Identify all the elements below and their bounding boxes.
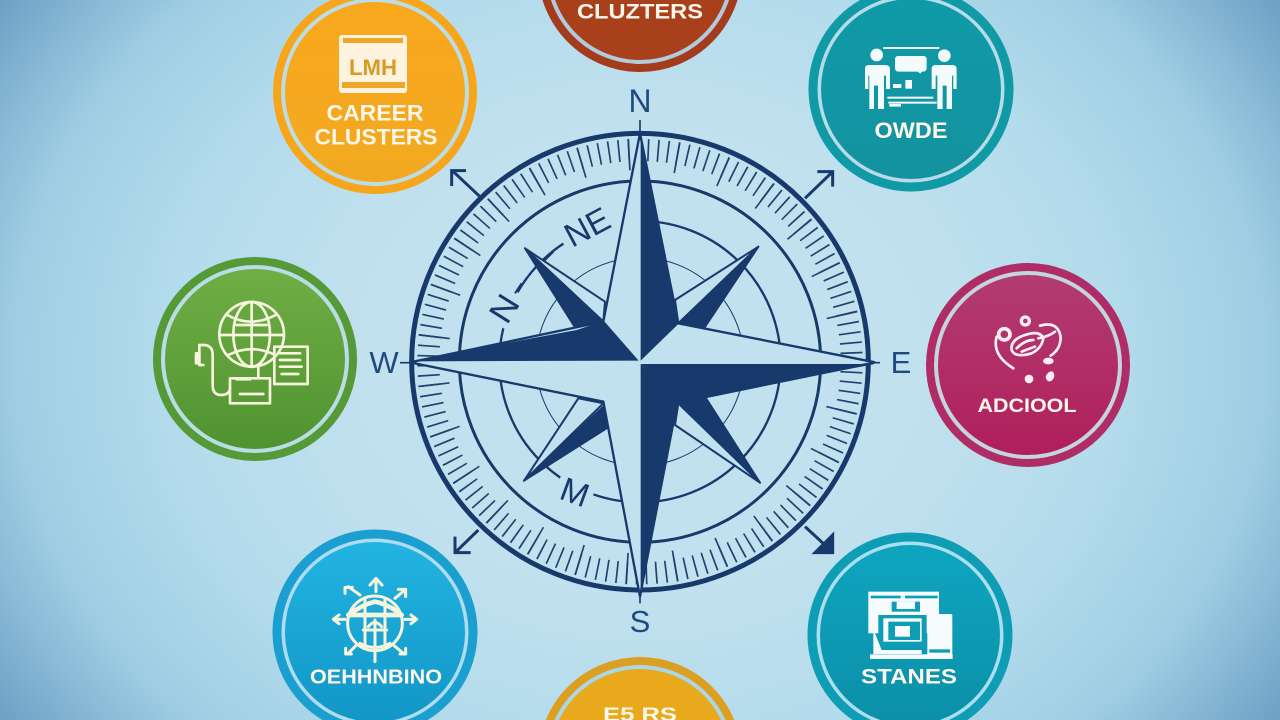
main star light fill [410, 133, 875, 597]
label: oehhnbino: OEHHNBINO [310, 666, 442, 688]
icon: abstract shapes [996, 317, 1061, 383]
compass rings [412, 133, 868, 590]
compass [400, 120, 880, 603]
inner letter M: M [555, 471, 594, 515]
badge: clusters (brown, top) [542, 0, 738, 68]
arrow: northeast [805, 172, 833, 198]
icon: globe with arrows [333, 578, 417, 662]
label: owde: OWDE [874, 118, 948, 143]
cardinal letter S: S [630, 604, 650, 639]
ring gaps behind text [480, 187, 627, 512]
icon: globe with document and cable [196, 302, 308, 403]
badge: owde (teal) [813, 0, 1009, 187]
cardinal letter W: W [369, 345, 399, 380]
cardinal letter N: N [628, 83, 652, 119]
axis end lines [400, 120, 880, 603]
arrow: southeast [805, 527, 833, 553]
secondary star points [524, 247, 760, 483]
label: clusters: CLUZTERS [577, 0, 703, 24]
arrow: northwest [452, 171, 480, 197]
badge: career clusters (orange): CLUSTERS [314, 124, 438, 150]
arrow: southwest [455, 530, 478, 553]
main star dark facets [409, 133, 875, 598]
ring segments between letters [515, 252, 553, 293]
icon: printing machine [868, 592, 953, 659]
diagonal arrows [452, 171, 833, 553]
inner letter N: N [482, 288, 527, 330]
tick ring [428, 150, 852, 573]
icon: two people at a board [865, 47, 957, 109]
cardinal letter E: E [891, 345, 911, 380]
label: career clusters: CAREER [326, 100, 424, 126]
badge: adciool (magenta) [930, 267, 1126, 463]
badge: stanes (teal-blue) [812, 537, 1008, 720]
badge: globe (green) [157, 261, 353, 457]
badge: career clusters (orange) [277, 0, 473, 190]
icon: id card [339, 35, 407, 93]
label: adciool: ADCIOOL [978, 395, 1077, 417]
icon: id card: LMH [349, 55, 397, 80]
label: stanes: STANES [861, 666, 957, 688]
inner letters NE: NE [559, 201, 617, 255]
badge: oehhnbino (blue) [277, 534, 473, 720]
badge: bottom (amber) [542, 661, 738, 720]
